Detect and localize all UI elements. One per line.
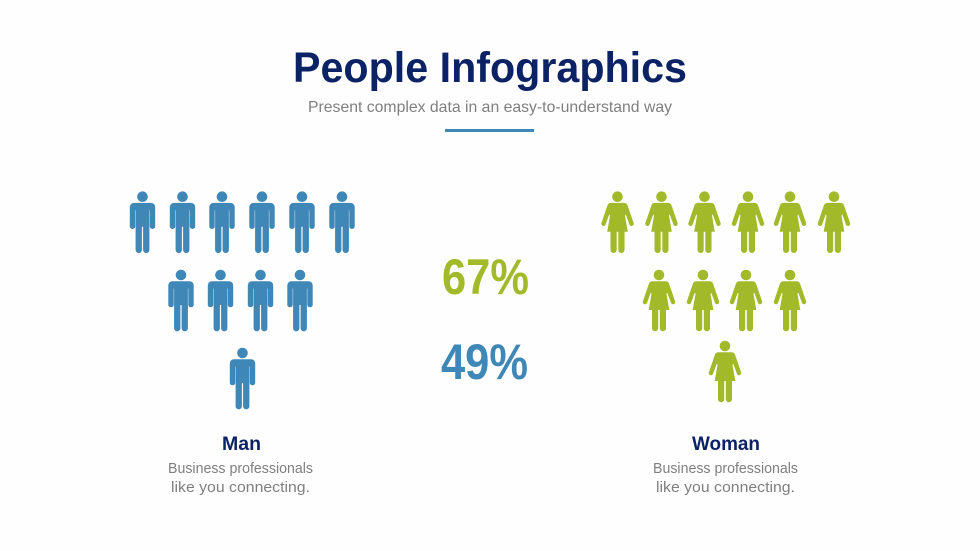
pictogram: men bbox=[130, 191, 355, 409]
title underline bbox=[445, 129, 534, 132]
man description: Business professionals bbox=[168, 460, 313, 477]
man description: like you connecting. bbox=[171, 479, 310, 496]
pictogram: women bbox=[601, 191, 850, 402]
woman description bbox=[653, 460, 798, 496]
man label: Man bbox=[222, 434, 261, 455]
woman description: like you connecting. bbox=[656, 479, 795, 496]
subtitle: Present complex data in an easy-to-understand way bbox=[308, 99, 672, 116]
woman description: Business professionals bbox=[653, 460, 798, 477]
percentage: 49%: 49% bbox=[441, 334, 528, 390]
man description bbox=[168, 460, 313, 496]
percentage: 67%: 67% bbox=[442, 249, 529, 305]
title: People Infographics bbox=[293, 44, 687, 92]
woman label: Woman bbox=[692, 434, 760, 455]
